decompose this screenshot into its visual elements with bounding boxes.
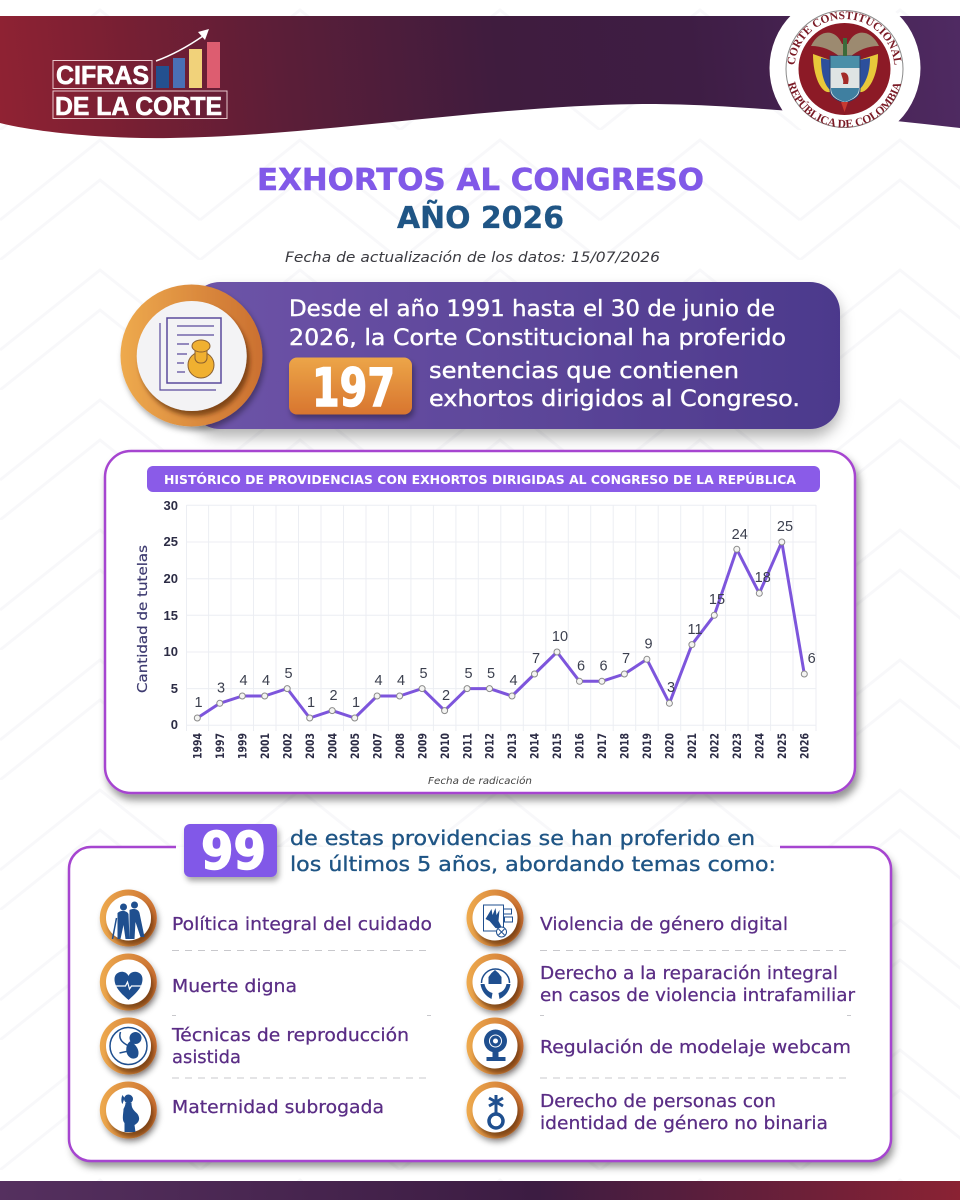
- icon: elderly people: [100, 890, 157, 946]
- banner text: exhortos dirigidos al Congreso.: [429, 387, 800, 412]
- data line: [197, 542, 804, 718]
- x axis title: Fecha de radicación: [428, 775, 532, 787]
- topic: Violencia de género digital: [466, 890, 788, 946]
- label: Derecho de personas con: [540, 1091, 776, 1112]
- x axis labels: 1999: [236, 733, 250, 759]
- data labels: 3: [217, 680, 225, 696]
- x axis labels: 2001: [258, 733, 272, 759]
- y axis labels: 15: [164, 608, 178, 623]
- y axis labels: 5: [171, 681, 178, 696]
- topic: Regulación de modelaje webcam: [466, 1018, 851, 1074]
- topic: Política integral del cuidado: [100, 890, 432, 946]
- x axis labels: 2023: [730, 733, 744, 759]
- panel: topics: [69, 822, 891, 1161]
- number badge 99: 99: [201, 822, 266, 882]
- data labels: 2: [442, 688, 450, 704]
- data labels: 25: [777, 519, 793, 535]
- topic: Muerte digna: [100, 954, 297, 1010]
- topic: Derecho a la reparación integral: [466, 954, 856, 1010]
- label: identidad de género no binaria: [540, 1113, 828, 1134]
- data labels: 2: [329, 688, 338, 704]
- title: [257, 163, 704, 236]
- data labels: 15: [709, 592, 725, 608]
- x axis labels: 2026: [798, 733, 812, 759]
- logo arrow: [156, 29, 209, 61]
- seal: Corte Constitucional: [770, 10, 920, 128]
- x axis labels: 2005: [348, 733, 362, 759]
- data labels: 5: [419, 666, 428, 682]
- icon: non-binary symbol: [466, 1082, 524, 1138]
- x axis labels: 2016: [573, 733, 587, 759]
- seal: Corte Constitucional: REPÚBLICA DE COLOMBIA: [788, 81, 902, 128]
- label: Maternidad subrogada: [172, 1097, 384, 1118]
- topic: Técnicas de reproducción asistida: [100, 1018, 409, 1074]
- data labels: 5: [464, 666, 473, 682]
- chart grid: [186, 505, 816, 731]
- topics heading: [280, 825, 780, 880]
- y axis labels: 10: [164, 644, 178, 659]
- data labels: 5: [284, 666, 293, 682]
- panel: line chart card: [105, 451, 855, 793]
- x axis labels: 2014: [528, 733, 542, 759]
- data labels: 6: [599, 658, 608, 674]
- logo text: CIFRAS: [56, 62, 149, 90]
- x axis labels: 2004: [326, 733, 340, 759]
- y axis labels: 0: [171, 717, 178, 732]
- data labels: 6: [808, 651, 816, 667]
- panel: 197 sentencias: [120, 282, 840, 429]
- banner text: Desde el año 1991 hasta el 30 de junio de: [289, 297, 775, 322]
- label: Técnicas de reproducción: [171, 1025, 409, 1046]
- seal: Corte Constitucional: CORTE CONSTITUCIONAL: [788, 11, 902, 65]
- data labels: 10: [552, 629, 568, 645]
- banner text: [289, 297, 800, 412]
- y axis labels: 25: [164, 534, 178, 549]
- label: Muerte digna: [172, 976, 297, 997]
- label: [171, 1025, 409, 1068]
- x axis labels: 2024: [752, 733, 766, 759]
- update date: Fecha de actualización de los datos: 15/07/2026: [285, 250, 660, 266]
- data labels: 4: [262, 673, 270, 689]
- header banner: [0, 16, 960, 138]
- banner text: sentencias que contienen: [429, 359, 739, 384]
- data labels: 4: [397, 673, 405, 689]
- x axis labels: 2009: [415, 733, 429, 759]
- y axis labels: [164, 498, 178, 732]
- y axis labels: 20: [164, 571, 178, 586]
- data labels: 9: [644, 636, 653, 652]
- x axis labels: 2008: [393, 733, 407, 759]
- x axis labels: 2007: [370, 733, 384, 759]
- label: Política integral del cuidado: [172, 914, 432, 935]
- data labels: 1: [352, 695, 360, 711]
- footer band: [0, 1181, 960, 1200]
- x axis labels: 1997: [213, 733, 227, 759]
- icon: heart with pulse: [100, 954, 157, 1010]
- title: EXHORTOS AL CONGRESO: [257, 163, 704, 198]
- x axis labels: 2025: [775, 733, 789, 759]
- data labels: 4: [374, 673, 383, 689]
- y axis labels: 30: [164, 498, 178, 513]
- icon: pregnant woman: [100, 1082, 157, 1138]
- title: AÑO 2026: [397, 199, 564, 236]
- logo: Cifras de la Corte: [53, 29, 227, 121]
- data labels: 1: [194, 695, 203, 711]
- x axis labels: 2022: [708, 733, 722, 759]
- x axis labels: 2010: [438, 733, 452, 759]
- x axis labels: 2019: [640, 733, 654, 759]
- x axis labels: 2021: [685, 733, 699, 759]
- icon: hand on screen: [466, 890, 524, 946]
- icon: hands holding family: [466, 954, 524, 1010]
- x axis labels: 2003: [303, 733, 317, 759]
- data labels: [194, 519, 816, 711]
- label: Derecho a la reparación integral: [540, 963, 838, 984]
- topic: Maternidad subrogada: [100, 1082, 384, 1138]
- topics heading: de estas providencias se han proferido en: [290, 826, 755, 850]
- icon: document with stamp: [120, 284, 262, 426]
- data markers: [194, 539, 807, 721]
- label: Violencia de género digital: [540, 914, 788, 935]
- label: [540, 1091, 828, 1134]
- data labels: 7: [622, 651, 630, 667]
- label: Regulación de modelaje webcam: [540, 1037, 851, 1058]
- logo text: DE LA CORTE: [55, 93, 222, 121]
- label: en casos de violencia intrafamiliar: [540, 985, 856, 1006]
- x axis labels: 2011: [460, 733, 474, 759]
- data labels: 6: [577, 658, 585, 674]
- data labels: 1: [307, 695, 315, 711]
- data labels: 4: [239, 673, 248, 689]
- data labels: 18: [755, 570, 771, 586]
- x axis labels: 2013: [505, 733, 519, 759]
- x axis labels: 2012: [483, 733, 497, 759]
- row dividers: [172, 950, 851, 1078]
- icon: fetus: [100, 1018, 157, 1074]
- topics heading: los últimos 5 años, abordando temas como:: [290, 852, 776, 876]
- x axis labels: 2018: [618, 733, 632, 759]
- x axis labels: 2020: [663, 733, 677, 759]
- chart title bar: HISTÓRICO DE PROVIDENCIAS CON EXHORTOS DIRIGIDAS AL CONGRESO DE LA REPÚBLICA: [164, 472, 796, 487]
- x axis labels: 1994: [190, 733, 204, 759]
- label: asistida: [172, 1047, 241, 1068]
- logo text: [53, 60, 227, 121]
- data labels: 3: [667, 680, 675, 696]
- icon: webcam: [466, 1018, 524, 1074]
- data labels: 11: [687, 622, 703, 638]
- x axis labels: 2002: [280, 733, 294, 759]
- banner text: 2026, la Corte Constitucional ha proferido: [289, 326, 786, 351]
- data labels: 4: [509, 673, 518, 689]
- data labels: 5: [487, 666, 495, 682]
- topic: Identidad de género no binaria: [466, 1082, 828, 1138]
- data labels: 24: [732, 527, 748, 543]
- number badge 197: 197: [312, 358, 395, 419]
- data labels: 7: [532, 651, 540, 667]
- chart title bar: [147, 466, 820, 492]
- logo bar chart: [156, 42, 220, 88]
- x axis labels: 2017: [595, 733, 609, 759]
- y axis title: Cantidad de tutelas: [135, 545, 151, 693]
- label: [540, 963, 856, 1006]
- x axis labels: [190, 733, 812, 759]
- x axis labels: 2015: [550, 733, 564, 759]
